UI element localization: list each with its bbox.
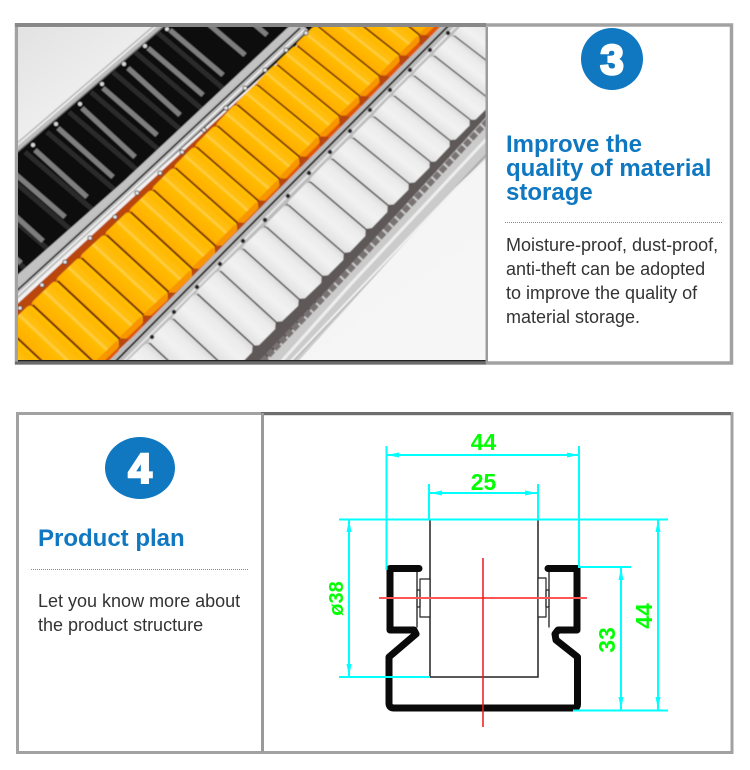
- badge: number 4: [105, 437, 175, 499]
- dimension labels: 25: [471, 469, 496, 495]
- channel profile: [389, 568, 578, 708]
- body text: storage benefits: anti-theft can be adopted: [506, 259, 705, 279]
- dimension labels: [326, 429, 657, 653]
- panel: product plan: [18, 412, 732, 752]
- dimension labels: 44: [471, 429, 496, 455]
- heading: improve the quality of material storage: Improve the: [506, 131, 642, 158]
- cyan dimension lines: [339, 446, 668, 710]
- body text: product structure: Let you know more about: [38, 591, 240, 611]
- dimension labels: ø38: [326, 581, 348, 616]
- badge: number 3: [581, 28, 643, 90]
- photo: roller tracks in black, orange and white: [18, 27, 486, 360]
- roller body: [430, 520, 538, 677]
- heading: improve the quality of material storage: quality of material: [506, 155, 711, 182]
- badge: number 3: 3: [600, 36, 624, 83]
- dimension labels: 33: [594, 627, 620, 653]
- body text: storage benefits: material storage.: [506, 307, 640, 327]
- heading: improve the quality of material storage: storage: [506, 179, 593, 206]
- heading: product plan: Product plan: [38, 525, 185, 552]
- body text: storage benefits: to improve the quality of: [506, 283, 698, 303]
- body text: storage benefits: Moisture-proof, dust-proof,: [506, 235, 718, 255]
- badge: number 4: 4: [128, 445, 152, 492]
- body text: product structure: the product structure: [38, 615, 203, 635]
- dimension labels: 44: [631, 603, 657, 629]
- technical drawing: roller cross-section: [326, 429, 668, 727]
- panel: improve storage quality: [14, 23, 734, 365]
- red centre lines: [379, 558, 587, 727]
